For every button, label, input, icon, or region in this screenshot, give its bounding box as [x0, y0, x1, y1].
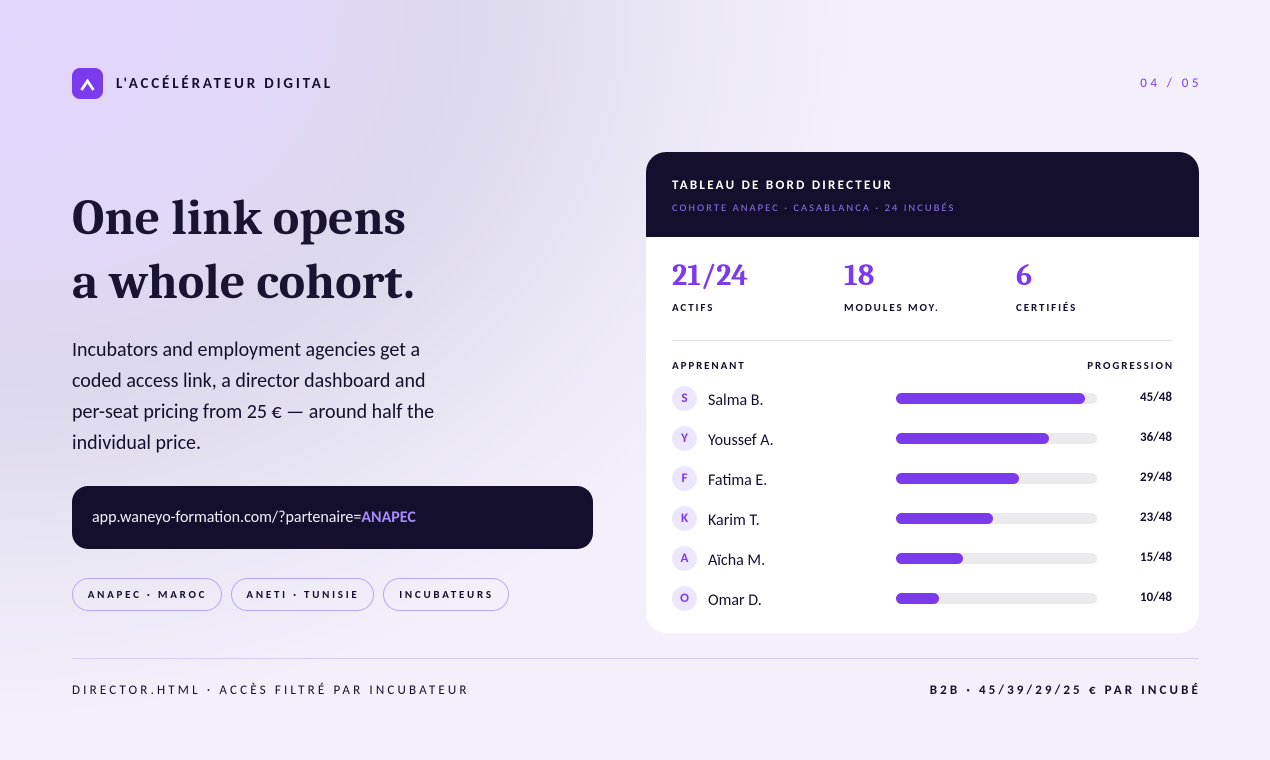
intro text: individual price.	[72, 431, 201, 455]
chip: incubateurs	[383, 578, 509, 611]
row: Aicha: A	[681, 551, 688, 566]
row: Karim	[672, 506, 1172, 531]
access link box: app.waneyo-formation.com/?partenaire=ANAPEC	[92, 508, 416, 527]
row: Omar: O	[680, 591, 689, 606]
row: Youssef	[672, 426, 1172, 451]
stat: actifs: ACTIFS	[672, 301, 714, 314]
panel: dashboard	[646, 152, 1199, 633]
stat: modules: 18	[844, 258, 874, 293]
chip: incubateurs: INCUBATEURS	[399, 588, 494, 601]
row: Omar: Omar D.	[708, 591, 762, 610]
cohort subtitle: COHORTE ANAPEC · CASABLANCA · 24 INCUBÉS	[672, 201, 955, 214]
stat: certifies: CERTIFIÉS	[1016, 301, 1077, 314]
row: Fatima: 29/48	[1140, 470, 1172, 485]
stat: certifies: 6	[1016, 258, 1032, 293]
access link box	[72, 486, 593, 549]
chip: ANAPEC: ANAPEC · MAROC	[88, 588, 207, 601]
column head: progression: PROGRESSION	[1087, 359, 1174, 372]
icon: logo	[72, 68, 103, 99]
intro text: Incubators and employment agencies get a	[72, 338, 420, 362]
row: Fatima: Fatima E.	[708, 471, 767, 490]
dashboard title: TABLEAU DE BORD DIRECTEUR	[672, 178, 893, 193]
stat: modules	[844, 258, 940, 314]
row: Omar: 10/48	[1140, 590, 1172, 605]
row: Fatima: F	[682, 471, 687, 486]
intro text: per-seat pricing from 25 € — around half the	[72, 400, 434, 424]
footer left: DIRECTOR.HTML · ACCÈS FILTRÉ PAR INCUBATEUR	[72, 683, 470, 698]
chip: ANETI	[231, 578, 374, 611]
row: Salma: S	[681, 391, 688, 406]
title: One link opens	[72, 189, 406, 247]
row: Omar	[672, 586, 1172, 611]
row: Salma: 45/48	[1140, 390, 1172, 405]
page number: 04 / 05	[1140, 76, 1202, 91]
row: Aicha: Aïcha M.	[708, 551, 765, 570]
row: Youssef: 36/48	[1140, 430, 1172, 445]
row: Fatima	[672, 466, 1172, 491]
row: Salma	[672, 386, 1172, 411]
row: Aicha	[672, 546, 1172, 571]
row: Aicha: 15/48	[1140, 550, 1172, 565]
stat: actifs: 21/24	[672, 258, 748, 293]
row: Salma: Salma B.	[708, 391, 764, 410]
row: Karim: 23/48	[1140, 510, 1172, 525]
chip: ANETI: ANETI · TUNISIE	[246, 588, 360, 601]
chip: ANAPEC	[72, 578, 222, 611]
intro text: coded access link, a director dashboard and	[72, 369, 425, 393]
intro text	[72, 338, 434, 455]
footer right: B2B · 45/39/29/25 € PAR INCUBÉ	[930, 683, 1201, 698]
stat: modules: MODULES MOY.	[844, 301, 940, 314]
row: Youssef: Youssef A.	[708, 431, 774, 450]
stat: actifs	[672, 258, 748, 314]
row: Karim: Karim T.	[708, 511, 760, 530]
title	[72, 189, 415, 311]
brand name: L'ACCÉLÉRATEUR DIGITAL	[116, 75, 333, 93]
column head: apprenant: APPRENANT	[672, 359, 746, 372]
row: Youssef: Y	[681, 431, 688, 446]
stat: certifies	[1016, 258, 1077, 314]
row: Karim: K	[681, 511, 688, 526]
dashboard header	[646, 152, 1199, 237]
title: a whole cohort.	[72, 253, 415, 311]
